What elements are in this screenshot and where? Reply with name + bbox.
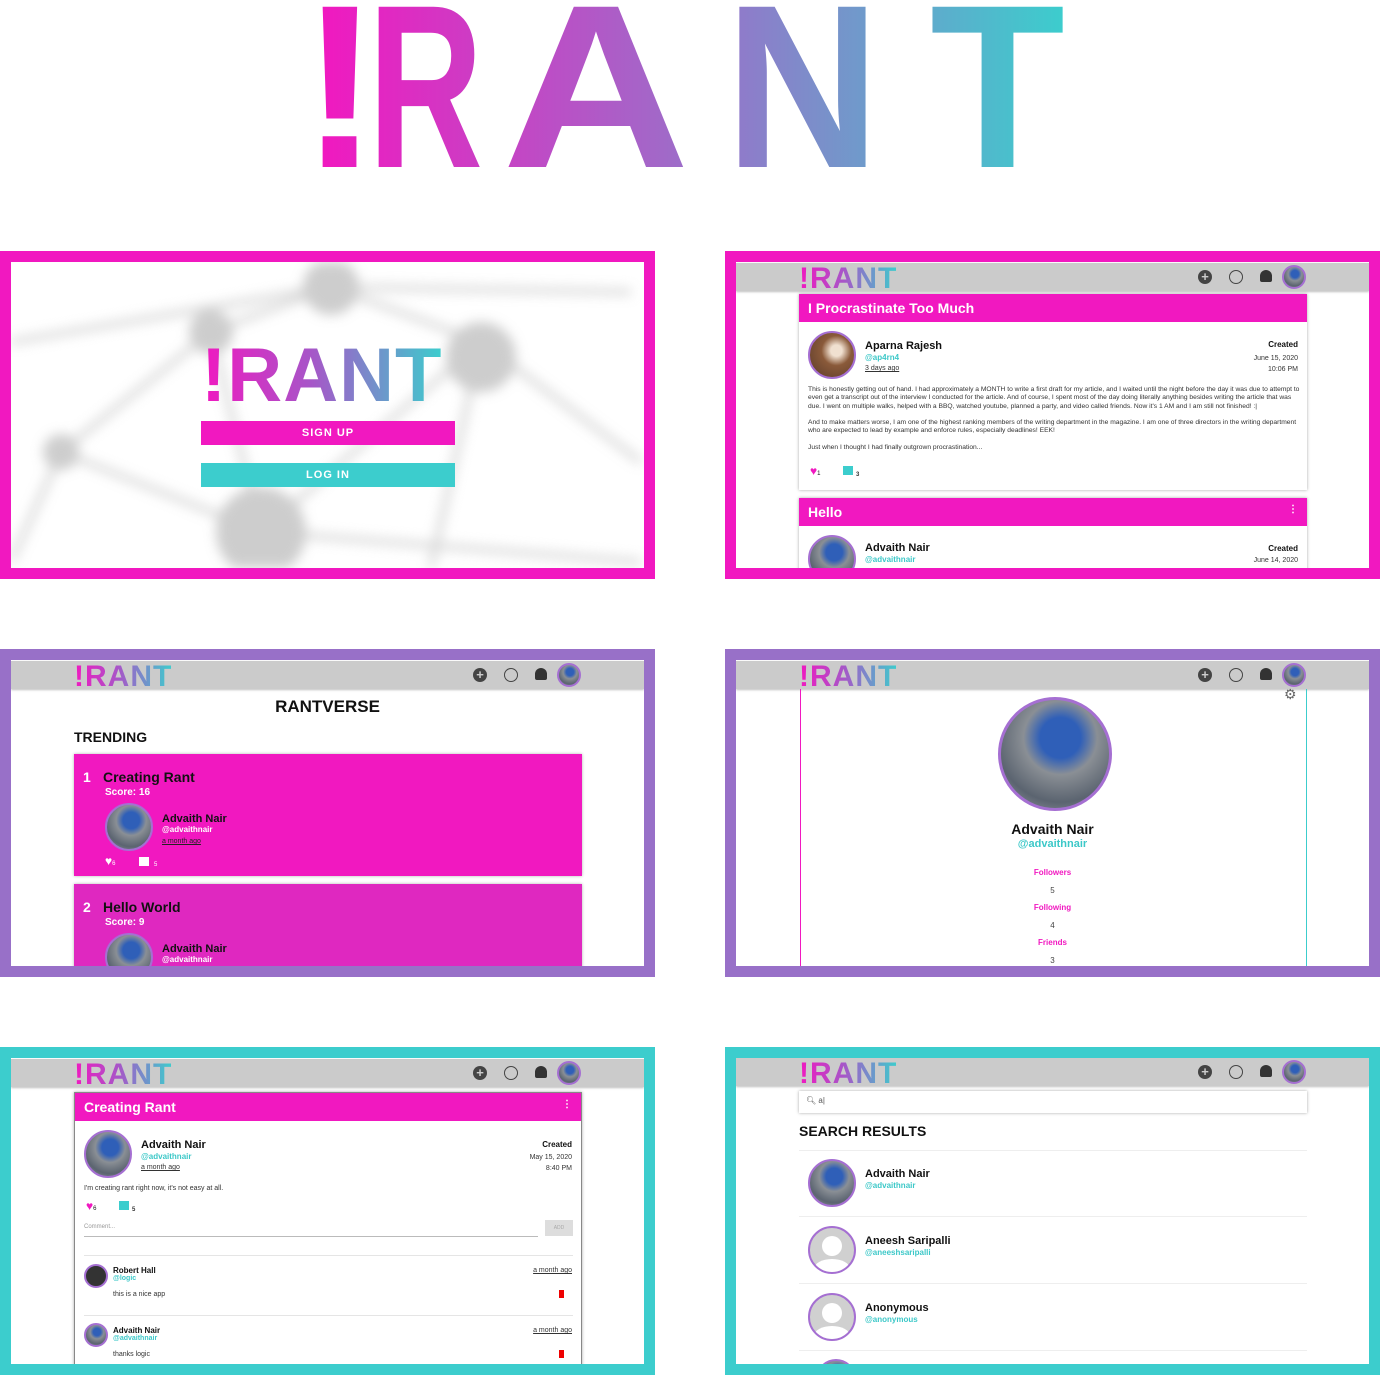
card: trending 2: Score: 9 bbox=[105, 917, 144, 928]
header bar bbox=[736, 661, 1369, 689]
header bar: + bbox=[476, 667, 484, 682]
card: Creating Rant: thanks logic bbox=[113, 1351, 150, 1358]
panel: landing screen bbox=[0, 251, 655, 579]
comment input: Comment... bbox=[84, 1224, 115, 1230]
button: log in: LOG IN bbox=[306, 469, 350, 481]
result: Anonymous bbox=[808, 1293, 856, 1341]
panel: search results: Aneesh Saripalli bbox=[865, 1235, 951, 1247]
panel: search results: Anonymous bbox=[865, 1302, 929, 1314]
header bar bbox=[736, 1058, 1369, 1086]
header bar: !RANT bbox=[74, 1058, 172, 1091]
card: Creating Rant: Robert Hall bbox=[113, 1266, 156, 1275]
stats bbox=[1034, 868, 1071, 964]
card: I Procrastinate Too Much: @ap4rn4 bbox=[865, 353, 899, 362]
card: Creating Rant: ADD bbox=[554, 1225, 564, 1231]
icon: settings gear: ⚙ bbox=[1284, 686, 1297, 702]
result: Advaith Nair bbox=[808, 1159, 856, 1207]
card: Creating Rant: @logic bbox=[113, 1275, 136, 1282]
panel: search results: @advaithnair bbox=[865, 1181, 915, 1190]
panel: search results: @aneeshsaripalli bbox=[865, 1248, 931, 1257]
title: big RANT logo bbox=[300, 0, 1065, 200]
card: trending 1: a month ago bbox=[162, 838, 201, 845]
card: I Procrastinate Too Much: Aparna Rajesh bbox=[865, 340, 942, 352]
card: trending 2 bbox=[74, 884, 582, 984]
card: trending 1: Advaith Nair bbox=[162, 813, 227, 825]
stats: 4 bbox=[1050, 920, 1055, 930]
comment: Robert Hall bbox=[84, 1264, 108, 1288]
card: Hello: ⋮ bbox=[1288, 504, 1298, 515]
card: I Procrastinate Too Much: Just when I thought I had finally outgrown procrastination... bbox=[808, 444, 982, 451]
card: I Procrastinate Too Much: I Procrastinate Too Much bbox=[808, 300, 974, 316]
profile name: Advaith Nair bbox=[1011, 821, 1094, 837]
card: Creating Rant: Created bbox=[542, 1140, 572, 1149]
card: Creating Rant bbox=[74, 1092, 582, 1376]
card: trending 1 bbox=[74, 754, 582, 876]
blurred network background bbox=[11, 262, 642, 568]
side lines bbox=[800, 689, 801, 969]
header bar: + bbox=[476, 1065, 484, 1080]
header bar: !RANT bbox=[799, 262, 897, 295]
button: sign up: SIGN UP bbox=[302, 427, 354, 439]
header bar bbox=[736, 263, 1369, 291]
header bar: + bbox=[1201, 269, 1209, 284]
header bar: + bbox=[1201, 1064, 1209, 1079]
card: Creating Rant: @advaithnair bbox=[141, 1152, 191, 1161]
search box: 🔍︎ a| bbox=[806, 1096, 825, 1105]
result: Aneesh Saripalli bbox=[808, 1226, 856, 1274]
card: Hello bbox=[799, 498, 1307, 588]
card: Creating Rant: a month ago bbox=[533, 1267, 572, 1274]
card: I Procrastinate Too Much bbox=[799, 294, 1307, 490]
heading: RANTVERSE: RANTVERSE bbox=[275, 697, 380, 716]
heading: SEARCH RESULTS: SEARCH RESULTS bbox=[799, 1123, 926, 1139]
card: trending 2: Advaith Nair bbox=[162, 943, 227, 955]
card: Creating Rant: 8:40 PM bbox=[546, 1165, 572, 1172]
card: Creating Rant: Creating Rant bbox=[84, 1099, 176, 1115]
button: sign up bbox=[201, 421, 455, 445]
card: I Procrastinate Too Much: Created bbox=[1268, 340, 1298, 349]
stats: 5 bbox=[1050, 886, 1055, 894]
comment: Advaith Nair bbox=[84, 1323, 108, 1347]
profile avatar bbox=[998, 697, 1112, 811]
card: Hello: Advaith Nair bbox=[865, 542, 930, 554]
card: trending 1: 5 bbox=[154, 862, 157, 868]
header bar: !RANT bbox=[74, 660, 172, 693]
card: trending 1: 1 bbox=[83, 769, 91, 785]
card: trending 1: @advaithnair bbox=[162, 825, 212, 834]
panel: search results bbox=[725, 1047, 1380, 1375]
card: I Procrastinate Too Much: 3 days ago bbox=[865, 365, 899, 372]
comment input bbox=[84, 1224, 538, 1237]
header bar: + bbox=[1201, 667, 1209, 682]
card: Creating Rant: @advaithnair bbox=[113, 1335, 157, 1342]
card: Creating Rant: ⋮ bbox=[562, 1099, 572, 1110]
card: trending 1: Score: 16 bbox=[105, 787, 150, 798]
card: Hello: @advaithnair bbox=[865, 555, 915, 564]
header bar: !RANT bbox=[799, 1057, 897, 1090]
stats: Friends bbox=[1038, 938, 1067, 947]
card: Hello: Created bbox=[1268, 544, 1298, 553]
card: trending 2: 2 bbox=[83, 899, 91, 915]
card: Creating Rant: this is a nice app bbox=[113, 1291, 165, 1298]
card: I Procrastinate Too Much: June 15, 2020 bbox=[1254, 355, 1298, 362]
header bar bbox=[11, 661, 644, 689]
logo: !RANT bbox=[201, 333, 442, 418]
card: Creating Rant: May 15, 2020 bbox=[530, 1154, 572, 1161]
panel: rant post view bbox=[725, 251, 1380, 579]
stats: Followers bbox=[1034, 868, 1071, 877]
card: Creating Rant: Advaith Nair bbox=[113, 1326, 160, 1335]
panel: search results: Advaith Nair bbox=[865, 1168, 930, 1180]
panel: rantverse trending bbox=[0, 649, 655, 977]
card: I Procrastinate Too Much: ♥1 bbox=[810, 464, 820, 478]
panel: search results: @anonymous bbox=[865, 1315, 918, 1324]
panel: profile bbox=[725, 649, 1380, 977]
card: trending 1: Creating Rant bbox=[103, 769, 195, 785]
card: Hello: June 14, 2020 bbox=[1254, 557, 1298, 564]
card: I Procrastinate Too Much: And to make matters worse, I am one of the highest ranking members of the writing department in the magazine. I am one of three directors in the writing department who are expected to lead by example and enforce rules, especially deadlines! EEK! bbox=[808, 419, 1296, 434]
header bar: !RANT bbox=[799, 660, 897, 693]
panel: profile: @advaithnair bbox=[1018, 838, 1087, 850]
card: Creating Rant: a month ago bbox=[533, 1327, 572, 1334]
card: Creating Rant: a month ago bbox=[141, 1164, 180, 1171]
search box bbox=[799, 1091, 1307, 1113]
card: Creating Rant: 5 bbox=[132, 1207, 135, 1213]
panel: rant detail with comments bbox=[0, 1047, 655, 1375]
card: Creating Rant: Advaith Nair bbox=[141, 1139, 206, 1151]
button: log in bbox=[201, 463, 455, 487]
card: trending 2: @advaithnair bbox=[162, 955, 212, 964]
card: trending 1: ♥6 bbox=[105, 854, 115, 868]
stats: Following bbox=[1034, 903, 1071, 912]
stats: 3 bbox=[1050, 956, 1055, 964]
card: Creating Rant: I'm creating rant right now, it's not easy at all. bbox=[84, 1185, 223, 1192]
card: I Procrastinate Too Much: This is honestly getting out of hand. I had approximately a MONTH to write a first draft for my article, and I waited until the night before the day it was due to attempt to even get a transcript out of the interview I conducted for the article. And of course, I spent most of the day doing literally anything besides writing the article that was due. I went on multiple walks, helped with a BBQ, watched youtube, planned a party, and video called friends. Now it's 1 AM and I am still not finished! :| bbox=[808, 386, 1299, 410]
card: I Procrastinate Too Much: 3 bbox=[856, 472, 859, 478]
heading: TRENDING: TRENDING bbox=[74, 729, 147, 745]
header bar bbox=[11, 1059, 644, 1087]
card: Creating Rant: ♥6 bbox=[86, 1199, 96, 1213]
card: I Procrastinate Too Much: 10:06 PM bbox=[1268, 366, 1298, 373]
card: Hello: Hello bbox=[808, 504, 842, 520]
card: trending 2: Hello World bbox=[103, 899, 181, 915]
